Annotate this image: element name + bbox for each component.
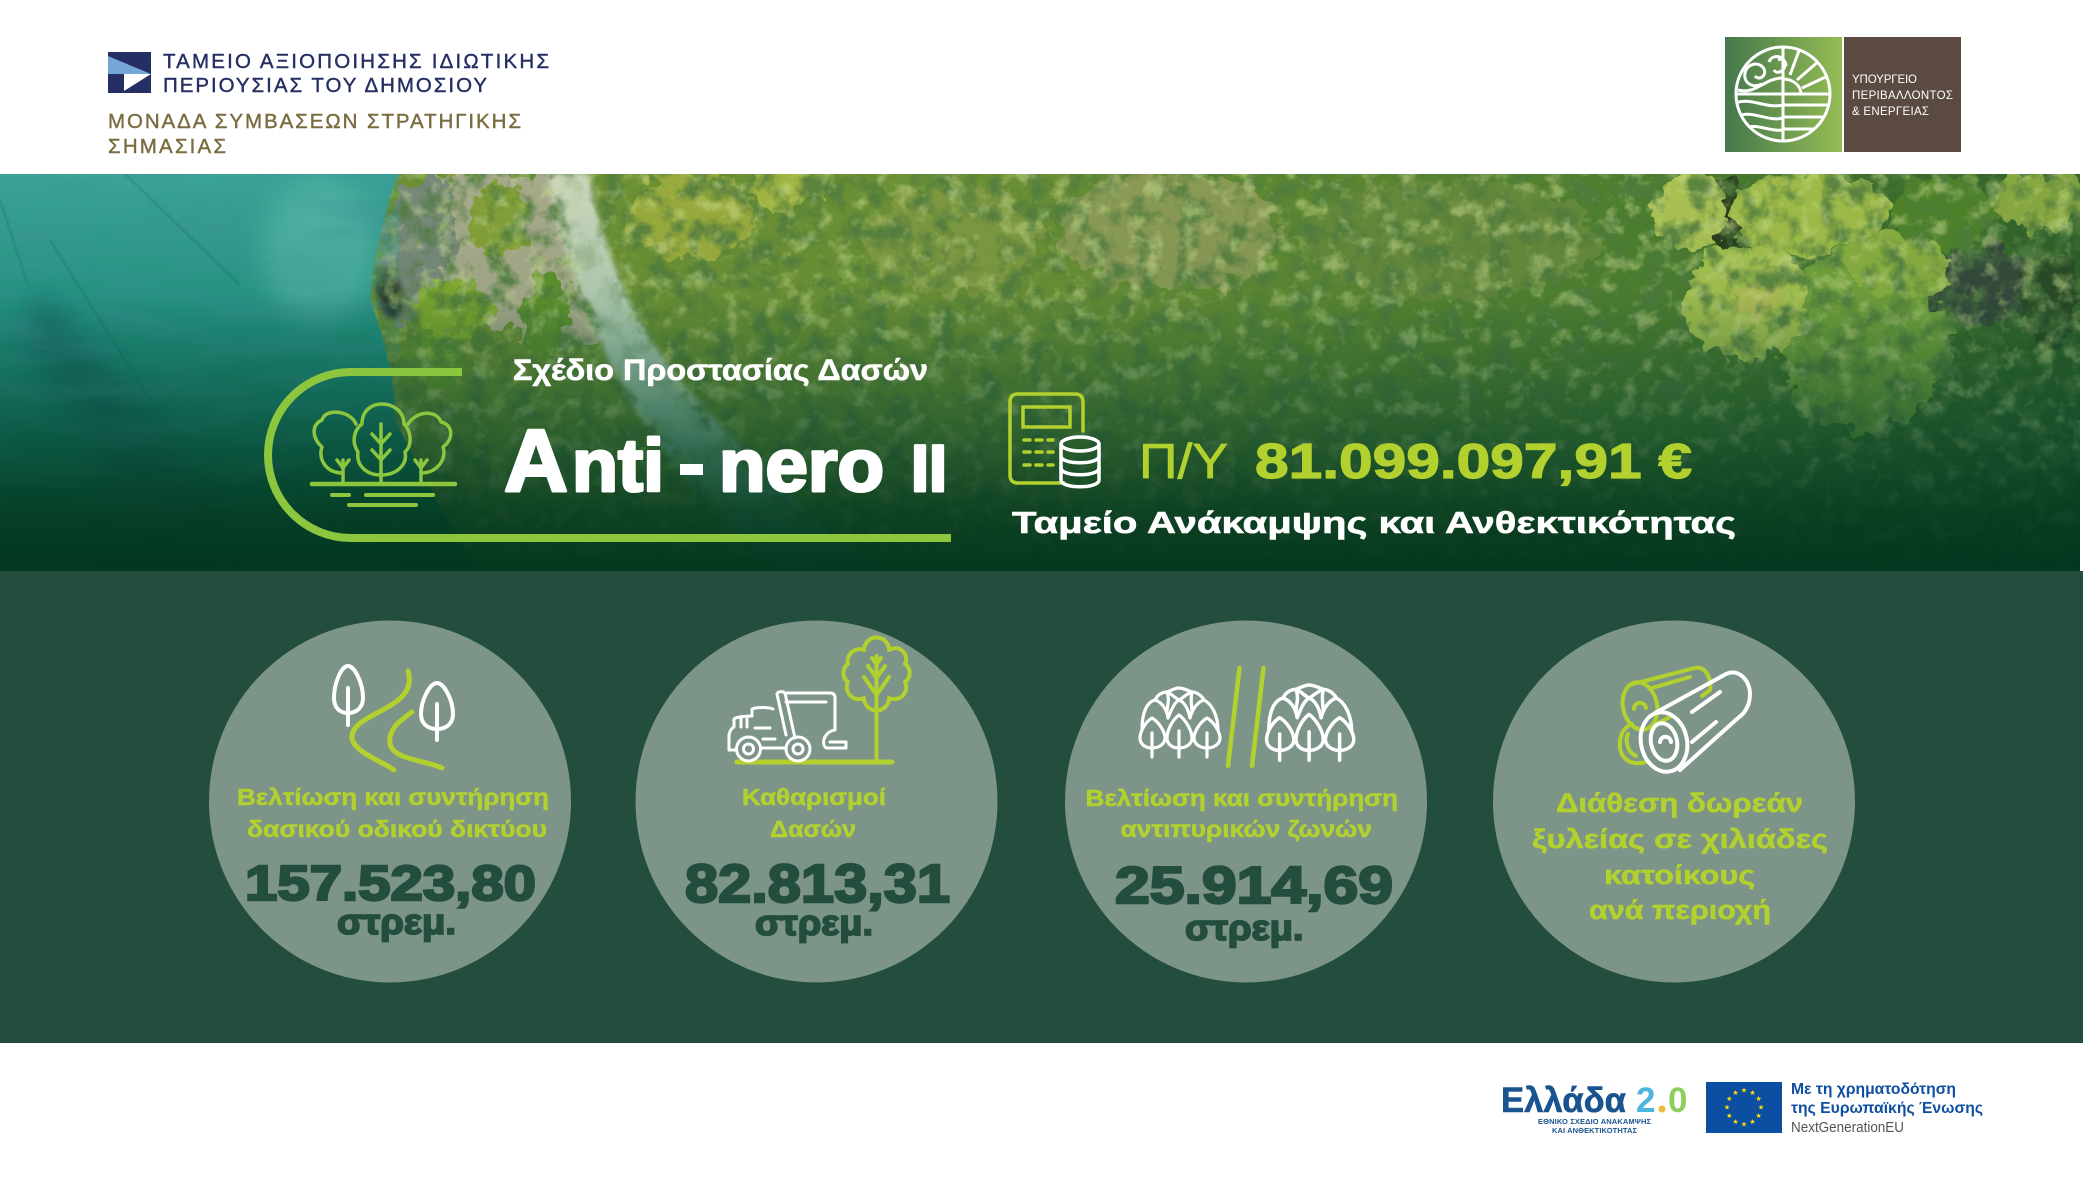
- budget amount: Π/Υ: [1139, 435, 1228, 489]
- panel: results band: [0, 571, 2083, 1043]
- EU funding statement: της Ευρωπαϊκής Ένωσης: [1791, 1100, 1983, 1117]
- label: δασικού οδικού δικτύου: [247, 816, 547, 842]
- panel: firebreak zones: [1065, 620, 1427, 982]
- label: αντιπυρικών ζωνών: [1120, 816, 1372, 842]
- value: 25.914,69: [1115, 857, 1393, 915]
- funding source: Ταμείο Ανάκαμψης και Ανθεκτικότητας: [1012, 505, 1736, 540]
- icon: logs: [1618, 668, 1750, 776]
- icon: budget calculator and coins: [1010, 394, 1099, 487]
- dark gradient overlay: [0, 284, 2080, 571]
- unit: στρεμ.: [337, 901, 456, 942]
- icon: EU flag: ★: [1741, 1120, 1747, 1128]
- label: Δασών: [770, 816, 856, 842]
- icon: EU flag: ★: [1756, 1095, 1762, 1103]
- unit name: ΣΗΜΑΣΙΑΣ: [108, 135, 226, 158]
- label: ξυλείας σε χιλιάδες: [1532, 824, 1828, 854]
- icon: EU flag: ★: [1726, 1095, 1732, 1103]
- title: [504, 411, 947, 510]
- label: Διάθεση δωρεάν: [1556, 788, 1803, 818]
- logo: Greece 2.0: 0: [1668, 1081, 1687, 1120]
- ministry name: ΥΠΟΥΡΓΕΙΟ: [1852, 74, 1917, 86]
- forest texture: [370, 174, 2080, 522]
- logo: Greece 2.0: Ελλάδα: [1501, 1081, 1626, 1120]
- budget amount: 81.099.097,91 €: [1255, 435, 1692, 489]
- panel: forest clearing: [636, 620, 998, 982]
- unit name: ΜΟΝΑΔΑ ΣΥΜΒΑΣΕΩΝ ΣΤΡΑΤΗΓΙΚΗΣ: [108, 110, 521, 133]
- fund name: ΤΑΜΕΙΟ ΑΞΙΟΠΟΙΗΣΗΣ ΙΔΙΩΤΙΚΗΣ: [163, 50, 549, 73]
- budget amount: [1139, 435, 1692, 489]
- sea: [0, 174, 454, 532]
- value: 157.523,80: [245, 857, 536, 911]
- fund name: ΠΕΡΙΟΥΣΙΑΣ ΤΟΥ ΔΗΜΟΣΙΟΥ: [163, 74, 487, 97]
- icon: EU flag: ★: [1741, 1086, 1747, 1094]
- shallow turquoise water: [260, 180, 380, 320]
- icon: EU flag: ★: [1732, 1118, 1739, 1126]
- unit name: [108, 110, 521, 158]
- icon: firebreak between tree clusters: [1140, 668, 1354, 766]
- dark rock: [372, 268, 403, 319]
- EU funding statement: [1791, 1081, 1983, 1136]
- label: ανά περιοχή: [1589, 895, 1771, 925]
- label: Βελτίωση και συντήρηση: [237, 784, 549, 810]
- dark sea bed streak: [22, 294, 138, 424]
- title: II: [911, 431, 947, 505]
- label: κατοίκους: [1604, 860, 1755, 890]
- subtitle: Σχέδιο Προστασίας Δασών: [513, 354, 928, 387]
- panel: forest road network: [209, 620, 571, 982]
- value: 82.813,31: [685, 854, 950, 914]
- sea texture: [0, 174, 400, 432]
- icon: fund emblem: [108, 52, 151, 93]
- forest road: [546, 174, 824, 532]
- panel: aerial photo banner: [0, 162, 2083, 571]
- icon: EU flag: ★: [1749, 1089, 1756, 1097]
- title: nti: [572, 424, 664, 507]
- EU funding statement: Με τη χρηματοδότηση: [1791, 1081, 1956, 1098]
- logo: ministry of environment and energy: [1725, 37, 1961, 152]
- icon: EU flag: ★: [1726, 1112, 1732, 1120]
- icon: EU flag: ★: [1749, 1118, 1756, 1126]
- sea floor lines: [0, 174, 240, 328]
- logo: Greece 2.0: [1501, 1081, 1687, 1135]
- road haze: [554, 174, 746, 494]
- ministry name: ΠΕΡΙΒΑΛΛΟΝΤΟΣ: [1852, 90, 1953, 102]
- icon: EU flag: ★: [1724, 1104, 1730, 1112]
- logo: Greece 2.0: ΚΑΙ ΑΝΘΕΚΤΙΚΟΤΗΤΑΣ: [1552, 1126, 1637, 1135]
- title: nero: [719, 424, 884, 507]
- unit: στρεμ.: [1185, 907, 1304, 948]
- icon: road and trees: [334, 666, 453, 770]
- icon: tree and excavator: [729, 638, 910, 762]
- icon: EU flag: ★: [1732, 1089, 1739, 1097]
- unit: στρεμ.: [755, 902, 873, 943]
- logo: asset development fund: [108, 50, 549, 158]
- title: A: [504, 411, 568, 510]
- ministry name: & ΕΝΕΡΓΕΙΑΣ: [1852, 106, 1929, 118]
- fund name: [163, 50, 549, 97]
- label: [1532, 788, 1828, 925]
- icon: EU flag: [1706, 1082, 1782, 1133]
- label: Βελτίωση και συντήρηση: [1086, 785, 1398, 811]
- logo: Greece 2.0: ΕΘΝΙΚΟ ΣΧΕΔΙΟ ΑΝΑΚΑΜΨΗΣ: [1538, 1117, 1651, 1126]
- label: [742, 784, 886, 842]
- logo: Greece 2.0: 2: [1636, 1081, 1655, 1120]
- panel: free firewood: [1493, 620, 1855, 982]
- EU funding statement: NextGenerationEU: [1791, 1120, 1904, 1136]
- panel: title frame: [268, 372, 951, 538]
- tree crowns and terrain: [378, 162, 2083, 432]
- icon: trees: [312, 404, 455, 505]
- label: [237, 784, 549, 842]
- ministry name: [1852, 74, 1953, 118]
- icon: EU flag: ★: [1756, 1112, 1762, 1120]
- icon: ministry emblem: [1736, 47, 1830, 141]
- icon: EU flag: ★: [1758, 1104, 1764, 1112]
- label: [1086, 785, 1398, 842]
- label: Καθαρισμοί: [742, 784, 886, 810]
